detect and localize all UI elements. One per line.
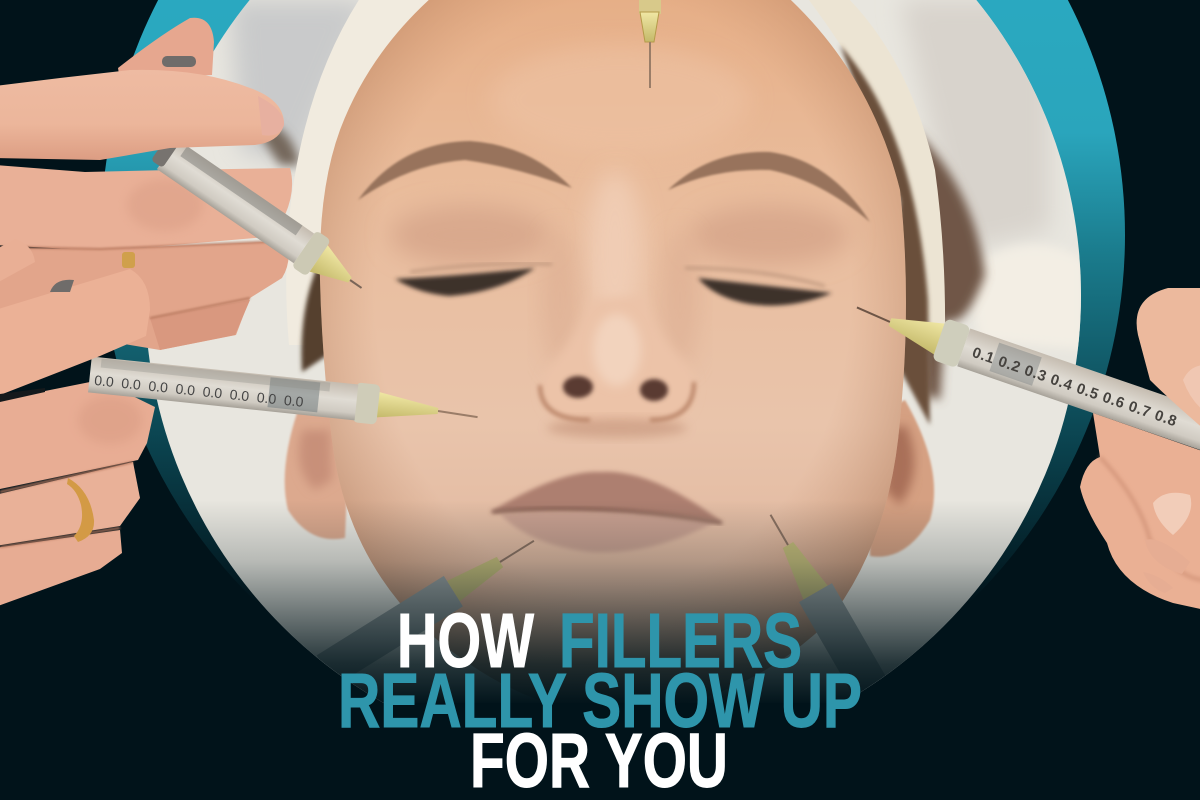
hair outside headband [250, 120, 985, 400]
right hand [1080, 288, 1200, 610]
headband [286, 0, 945, 345]
dark gap [0, 388, 45, 402]
small ring [122, 252, 135, 268]
fingernails [1153, 493, 1191, 535]
face [320, 0, 906, 715]
ears [285, 400, 934, 557]
thumb [1137, 288, 1200, 430]
closed eyes [395, 264, 832, 306]
fingernail [258, 96, 284, 136]
wedding ring [67, 478, 94, 542]
lips [490, 472, 722, 552]
second finger [0, 165, 292, 250]
hair at temples [301, 45, 930, 425]
title line 1: HOW [397, 598, 534, 684]
plunger tops [162, 56, 196, 67]
eyebrows [358, 141, 870, 222]
title line 1 [397, 598, 802, 684]
title line 1: FILLERS [559, 598, 802, 684]
top finger [0, 70, 284, 160]
teal circle backdrop [101, 0, 1125, 747]
syringe scale numbers: 0.0 0.0 0.0 0.0 0.0 0.0 0.0 0.0 [94, 372, 304, 410]
title line 2: REALLY SHOW UP [338, 658, 862, 744]
left hands: front fingers [0, 56, 284, 542]
syringe: right side [849, 289, 1200, 453]
towel backdrop [148, 0, 1081, 703]
syringe scale numbers: 0.1 0.2 0.3 0.4 0.5 0.6 0.7 0.8 [970, 344, 1179, 430]
left hands: back fingers [0, 18, 292, 607]
finger creases [0, 241, 287, 547]
title [338, 598, 862, 800]
syringe: top forehead [639, 0, 661, 88]
fingers mass [1080, 413, 1200, 610]
third finger [0, 241, 289, 350]
top fingertip [118, 18, 214, 80]
nose [540, 295, 695, 438]
syringe: left upper, temple [146, 130, 374, 306]
lowest fingers [0, 530, 122, 607]
circular photo of woman's face [148, 0, 1081, 703]
front finger [0, 269, 150, 397]
syringe: lower left jaw [317, 540, 534, 676]
small fingertip [0, 239, 35, 284]
solid dark base below photo [100, 703, 1100, 800]
syringe: lower right jaw [770, 514, 886, 692]
syringe: left lower, cheek [88, 355, 480, 435]
bottom fade to dark [198, 510, 1028, 703]
